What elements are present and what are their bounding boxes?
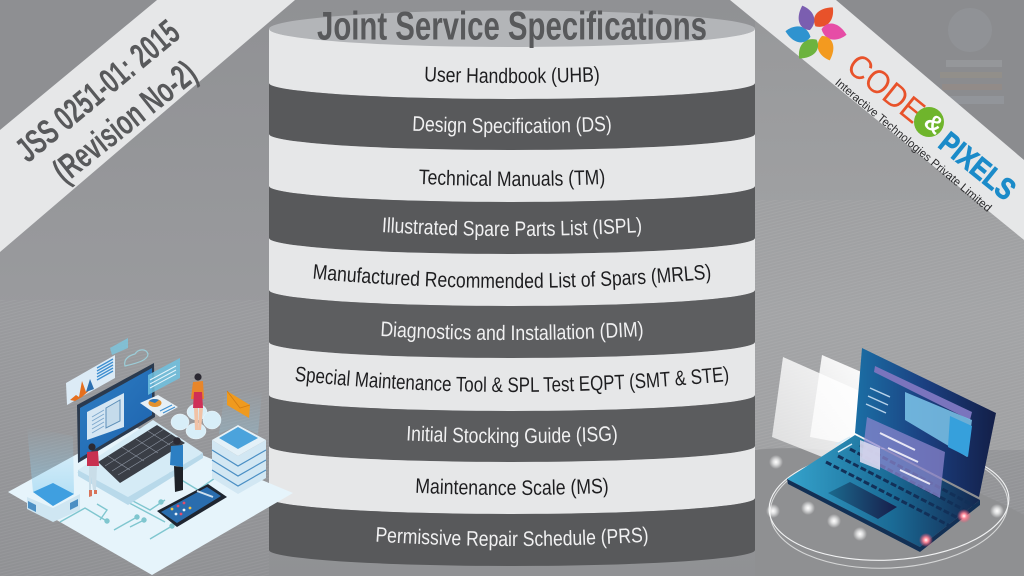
band: Illustrated Spare Parts List: Illustrated Spare Parts List (ISPL): [383, 217, 641, 240]
cylinder: specification stack: [269, 10, 755, 566]
band: User Handbook: [269, 30, 755, 99]
band: Maintenance Scale: [269, 446, 755, 514]
band: Illustrated Spare Parts List: [269, 186, 755, 254]
left ribbon: [0, 0, 295, 252]
keyboard keys: [826, 445, 974, 526]
band: Diagnostics and Installation: [269, 290, 755, 358]
laptop screen: [77, 363, 155, 463]
icon: faint globe watermark: [938, 8, 1004, 104]
glow lights: [766, 455, 1004, 547]
laptop screen: [855, 348, 996, 497]
note cards and cloud: [110, 338, 180, 395]
woman on discs: [191, 373, 204, 430]
platform: [8, 425, 293, 575]
woman left: [87, 443, 99, 497]
chart card: [66, 355, 115, 405]
laptop base: [78, 420, 203, 497]
server stack right: [212, 390, 266, 494]
icon: pinwheel logo: [785, 2, 847, 64]
band: Design Specification: Design Specification (DS): [413, 116, 611, 138]
ribbon heading: revision: (Revision No-2): [45, 53, 204, 191]
envelope: [227, 391, 250, 418]
band: Special Maintenance Tool: Special Maintenance Tool & SPL Test EQPT (SMT & STE): [296, 366, 728, 394]
man: [170, 437, 183, 492]
band: Design Specification: [269, 83, 755, 150]
trackpad: [828, 482, 897, 519]
band: Diagnostics and Installation: Diagnostics and Installation (DIM): [382, 321, 642, 342]
band: Permissive Repair Schedule: Permissive Repair Schedule (PRS): [376, 526, 648, 550]
band: Special Maintenance Tool: [269, 342, 755, 411]
keyboard: [98, 425, 185, 483]
band: Manufactured Recommended List: Manufactured Recommended List of Spars (MRLS): [314, 264, 710, 290]
floating white panels: [772, 355, 880, 470]
smartphone: [157, 484, 227, 527]
band: Technical Manuals: Technical Manuals (TM): [419, 168, 604, 190]
laptop base: [787, 435, 980, 552]
orbit rings: [766, 442, 1012, 574]
band: Manufactured Recommended List: [269, 238, 755, 306]
band: Maintenance Scale: Maintenance Scale (MS): [416, 478, 608, 498]
cylinder top cap: [269, 10, 755, 89]
band: Initial Stocking Guide: [269, 395, 755, 462]
logo mark: ampersand: &: [918, 108, 949, 140]
right ribbon with logo: [730, 0, 1024, 240]
circuit traces: [60, 470, 215, 539]
band: Permissive Repair Schedule: [269, 498, 755, 566]
logo word: CODE: CODE: [840, 46, 932, 130]
title: Joint Service Specifications: [317, 4, 707, 48]
illustration: isometric laptop workspace: [8, 338, 293, 575]
illustration: holographic laptop: [766, 348, 1012, 574]
logo tagline: Interactive Technologies Private Limited: [832, 77, 993, 215]
band: Initial Stocking Guide: Initial Stocking Guide (ISG): [408, 425, 617, 448]
pie chart card: [140, 395, 178, 417]
data discs: [171, 404, 221, 439]
holographic overlay: [835, 417, 945, 498]
server left with beam: [27, 427, 80, 522]
band: Technical Manuals: [269, 134, 755, 202]
band: User Handbook: User Handbook (UHB): [426, 66, 599, 87]
